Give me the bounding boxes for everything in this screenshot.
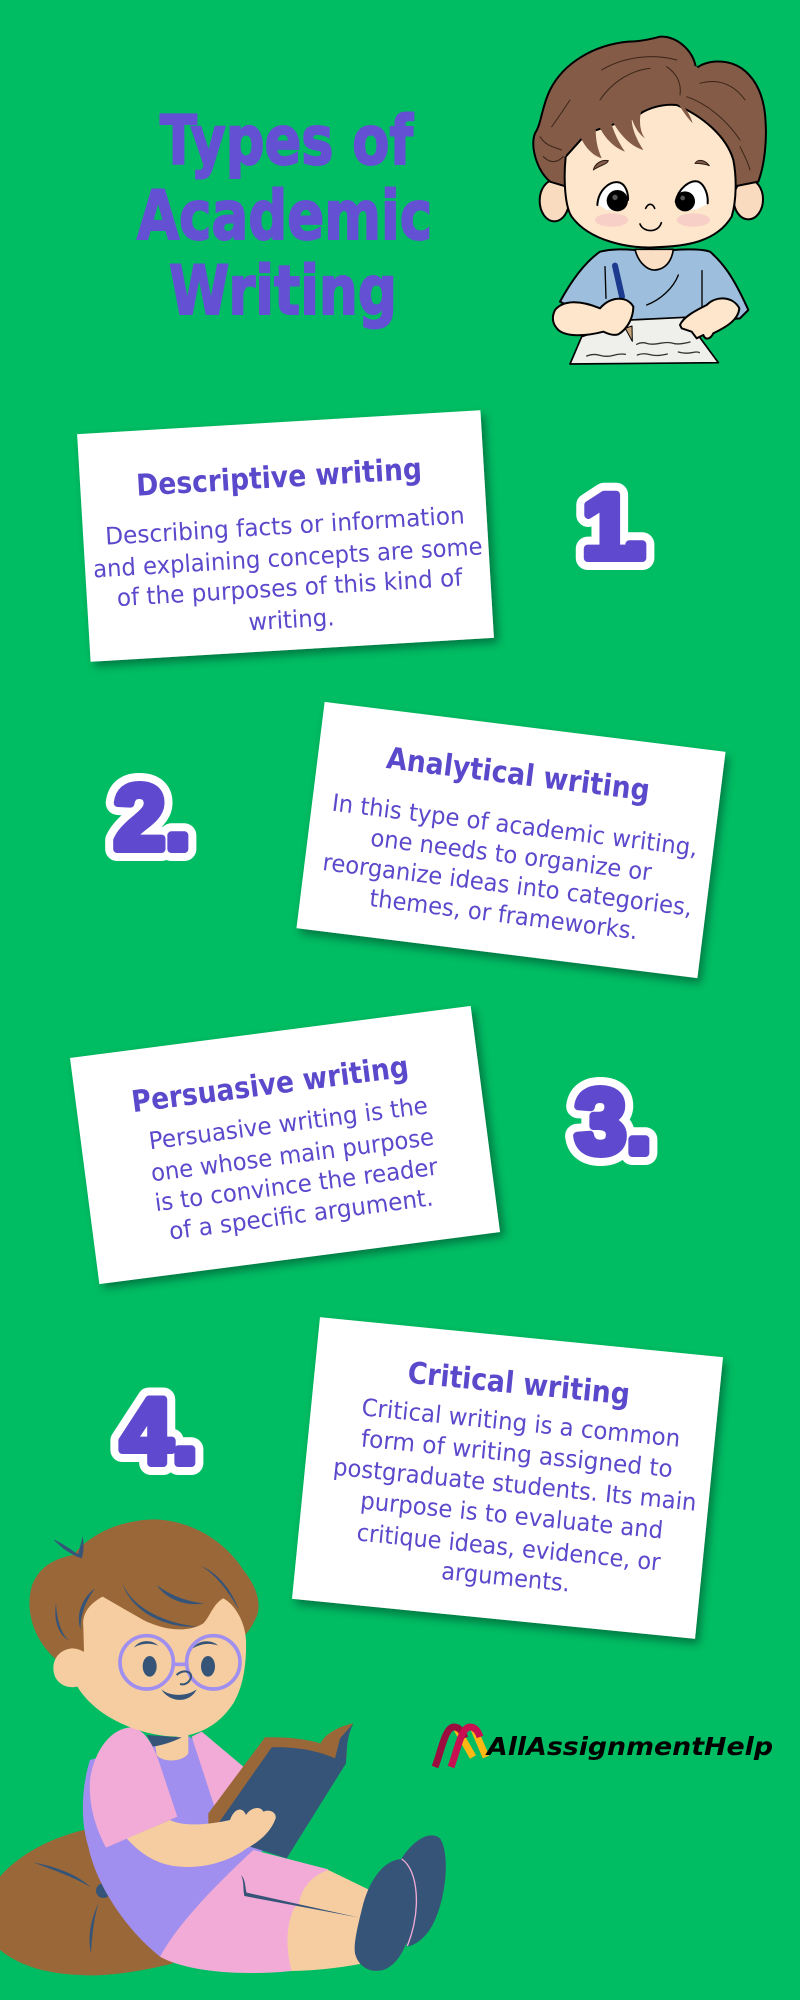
illustration part: beanbag seams <box>33 1862 111 1953</box>
card background <box>77 410 494 662</box>
number 4: 4. <box>121 1381 198 1483</box>
card heading: Critical writing <box>406 1356 632 1413</box>
number 2: 2. <box>114 767 191 869</box>
card body text: of a specific argument. <box>167 1183 435 1246</box>
illustration part: near shoe <box>355 1859 414 1971</box>
card body text: of the purposes of this kind of <box>116 564 464 612</box>
number 3: 3. <box>575 1071 652 1173</box>
card body text: reorganize ideas into categories, <box>321 848 694 922</box>
illustration part: eyes <box>134 1641 218 1677</box>
title: Types of <box>160 102 414 181</box>
title: Academic <box>137 177 432 256</box>
illustration part: paper <box>570 317 718 364</box>
card heading: Analytical writing <box>384 741 652 809</box>
card body text: one whose main purpose <box>149 1123 435 1187</box>
illustration part: lower legs <box>287 1870 368 1971</box>
card body text: is to convince the reader <box>153 1153 439 1217</box>
illustration part: arm and hand <box>127 1808 276 1867</box>
card 3: persuasive writing <box>70 1006 500 1284</box>
card body text <box>317 788 701 952</box>
card body text: critique ideas, evidence, or <box>356 1518 662 1576</box>
illustration part: glasses <box>120 1636 240 1689</box>
illustration part: pencil <box>615 266 632 341</box>
illustration part: ears <box>540 179 763 221</box>
card body text <box>145 1091 443 1247</box>
illustration part: face <box>565 105 736 247</box>
illustration part: shoe stripe <box>402 1859 416 1946</box>
illustration part: hair strands <box>540 57 750 170</box>
number 3: 3. <box>575 1071 652 1173</box>
illustration part: face <box>53 1597 246 1737</box>
title: Writing <box>169 252 397 331</box>
card body text: and explaining concepts are some <box>92 532 483 583</box>
illustration part: hair back <box>533 37 766 187</box>
card body text: one needs to organize or <box>369 824 653 887</box>
illustration part: shirt folds <box>605 267 702 308</box>
illustration part: hair strands <box>53 1536 239 1641</box>
illustration part: collar <box>147 1735 182 1747</box>
illustration part: shirt <box>560 249 748 322</box>
illustration part: overalls <box>83 1737 263 1957</box>
illustration part: fringe <box>543 43 753 168</box>
card body text: Describing facts or information <box>104 501 465 551</box>
illustration: child reading a book on a beanbag <box>0 1519 446 1975</box>
card body text <box>323 1391 704 1609</box>
card body text: In this type of academic writing, <box>331 789 699 862</box>
illustration part: left arm and hand <box>553 299 633 335</box>
illustration part: leg crease <box>241 1875 359 1918</box>
card heading: Descriptive writing <box>135 452 423 504</box>
card body text: purpose is to evaluate and <box>359 1487 664 1545</box>
title <box>137 102 432 331</box>
illustration part: book cover <box>208 1723 353 1824</box>
illustration part: hair <box>29 1519 259 1660</box>
number 1: 1. <box>582 476 643 578</box>
card body text: postgraduate students. Its main <box>332 1453 698 1517</box>
illustration part: sleeve <box>90 1727 177 1848</box>
illustration part: cheeks, nose and smile <box>595 204 710 231</box>
card 1: descriptive writing <box>77 410 494 662</box>
illustration part: far shoe <box>402 1835 446 1947</box>
card body text: themes, or frameworks. <box>368 884 639 945</box>
illustration part: neck <box>155 1733 188 1760</box>
illustration part: neck <box>635 249 673 270</box>
card background <box>296 702 726 978</box>
card heading: Persuasive writing <box>130 1050 411 1120</box>
card body text: Critical writing is a common <box>360 1393 682 1453</box>
card body text: Persuasive writing is the <box>147 1091 429 1155</box>
illustration part: shirt strap <box>192 1732 243 1808</box>
illustration part: writing lines <box>587 342 699 356</box>
card background <box>292 1317 723 1639</box>
card body text: form of writing assigned to <box>360 1424 674 1483</box>
illustration part: trousers <box>160 1850 328 1973</box>
card body text: arguments. <box>440 1557 571 1598</box>
illustration: boy writing at a desk <box>533 37 766 364</box>
card body text <box>90 500 487 645</box>
illustration part: eyebrows <box>593 160 709 170</box>
illustration part: nose and smile <box>161 1671 197 1700</box>
number 4: 4. <box>121 1381 198 1483</box>
card 4: critical writing <box>292 1317 723 1639</box>
card 2: analytical writing <box>296 702 726 978</box>
number 2: 2. <box>114 767 191 869</box>
number 1: 1. <box>582 476 643 578</box>
card body text: writing. <box>248 603 335 636</box>
logo: AllAssignmentHelp <box>435 1727 773 1767</box>
illustration part: book pages <box>218 1723 353 1858</box>
illustration part: right arm and hand <box>680 298 739 339</box>
illustration part: eyes <box>597 181 708 211</box>
illustration part: beanbag <box>0 1829 173 1975</box>
logo mark <box>435 1727 486 1767</box>
card background <box>70 1006 500 1284</box>
logo wordmark: AllAssignmentHelp <box>485 1732 773 1761</box>
